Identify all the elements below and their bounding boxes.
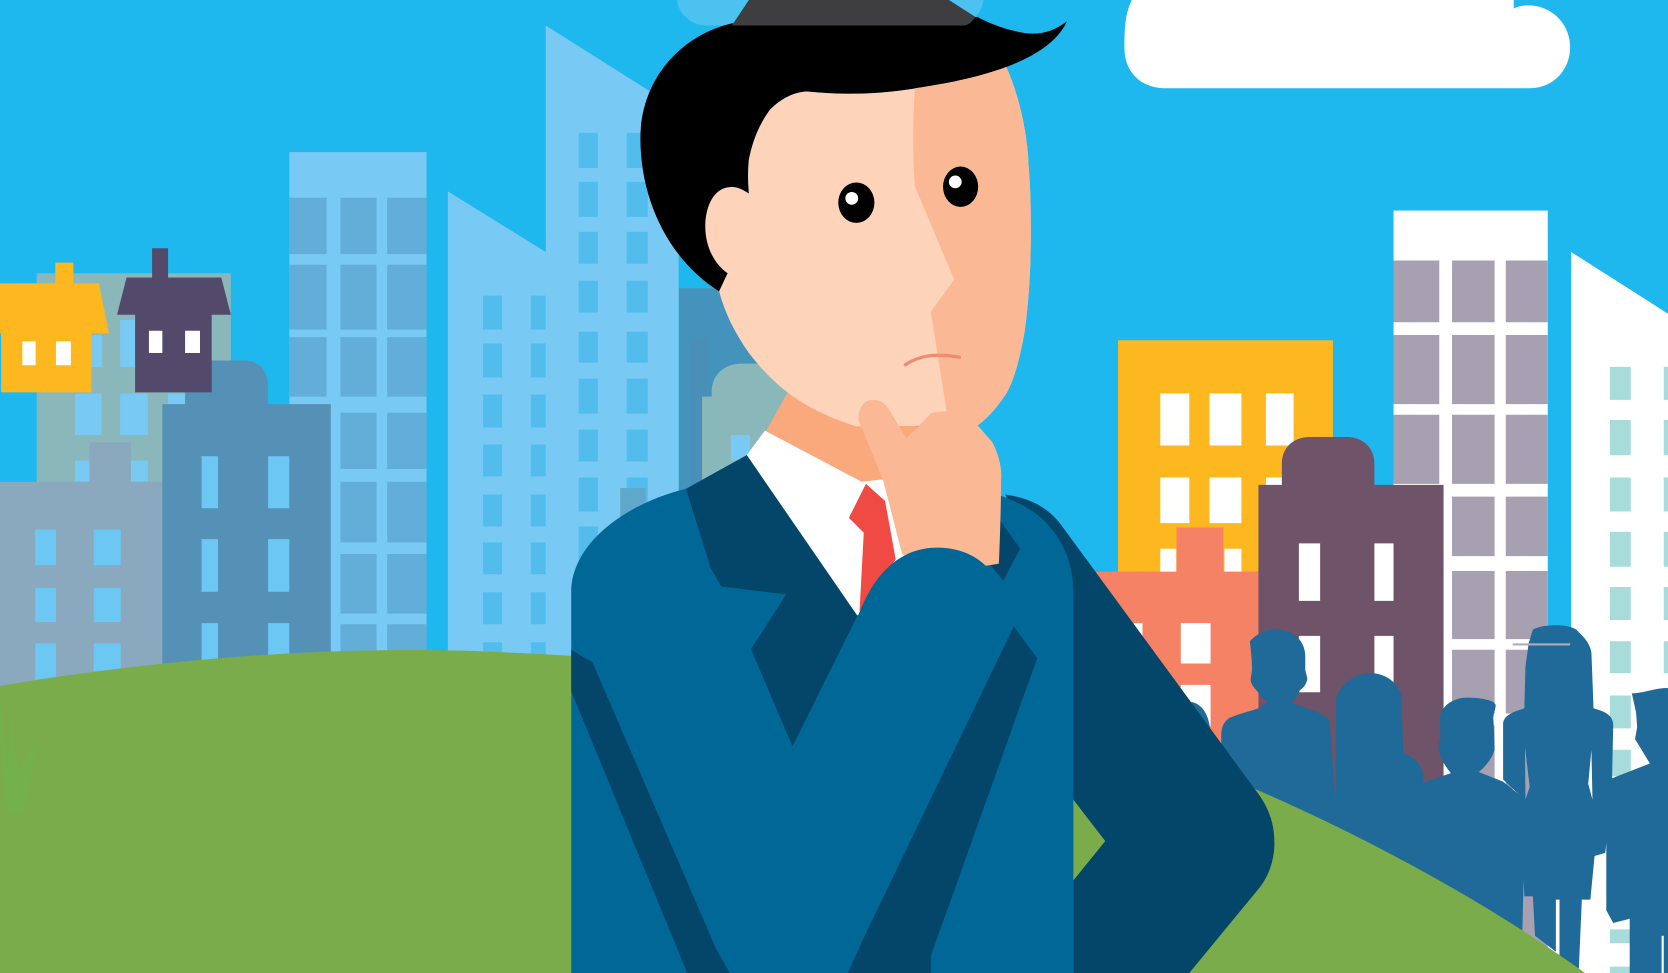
- man: ear: [705, 187, 766, 279]
- building: dark blue behind head: [679, 288, 774, 511]
- white cloud: [1124, 0, 1570, 88]
- man: sleeve shadow: [848, 626, 1037, 973]
- man: left eye: [838, 182, 874, 223]
- building: grey blue: [0, 442, 163, 702]
- man: face shaded side: [913, 67, 1031, 425]
- man: suit torso: [571, 455, 1073, 973]
- building: coral: [1096, 527, 1266, 766]
- man: left suit shadow: [571, 650, 730, 973]
- thin grey line on woman's head: [1513, 643, 1570, 645]
- man: right lapel: [989, 519, 1020, 581]
- building: mid blue: [162, 360, 331, 681]
- man: left lapel: [686, 455, 857, 746]
- man: neck: [762, 391, 925, 500]
- man: right eye: [943, 167, 978, 207]
- crowd silhouettes: [1181, 625, 1668, 973]
- building: teal behind houses: [37, 273, 231, 486]
- person: man five: [1606, 688, 1668, 973]
- cloud behind head: [677, 0, 984, 26]
- gap between woman's right arm and body: [1588, 750, 1592, 800]
- building: white slanted tower with teal windows: [1571, 252, 1668, 973]
- building: light blue grid tower: [289, 152, 427, 684]
- person: partly hidden left figure: [1181, 702, 1211, 766]
- man: hat brim: [732, 0, 975, 26]
- green hill: [0, 650, 1585, 973]
- man: red tie: [849, 484, 896, 611]
- man: shirt collar: [747, 431, 915, 617]
- person: woman two: [1335, 673, 1423, 904]
- building: white tower with grey windows: [1394, 211, 1571, 973]
- building: slanted light blue tower: [448, 26, 679, 681]
- man: mouth: [905, 355, 960, 365]
- man: hair: [640, 17, 1067, 291]
- house: dark purple: [117, 248, 231, 392]
- gap between woman's left arm and body: [1525, 746, 1530, 800]
- house: yellow: [0, 263, 109, 392]
- building: yellow office: [1118, 340, 1333, 585]
- person: man three: [1403, 698, 1525, 936]
- building: plum: [1258, 437, 1444, 808]
- person: man one: [1221, 630, 1342, 904]
- man: hand on chin: [858, 400, 1001, 574]
- man: raised forearm: [745, 548, 1014, 973]
- grass tuft: [0, 697, 37, 813]
- building: teal behind neck: [702, 364, 787, 510]
- businessman: [571, 0, 1274, 973]
- man: far arm: [1005, 494, 1274, 973]
- man: face light side: [719, 67, 1031, 426]
- person: woman four: [1503, 625, 1613, 973]
